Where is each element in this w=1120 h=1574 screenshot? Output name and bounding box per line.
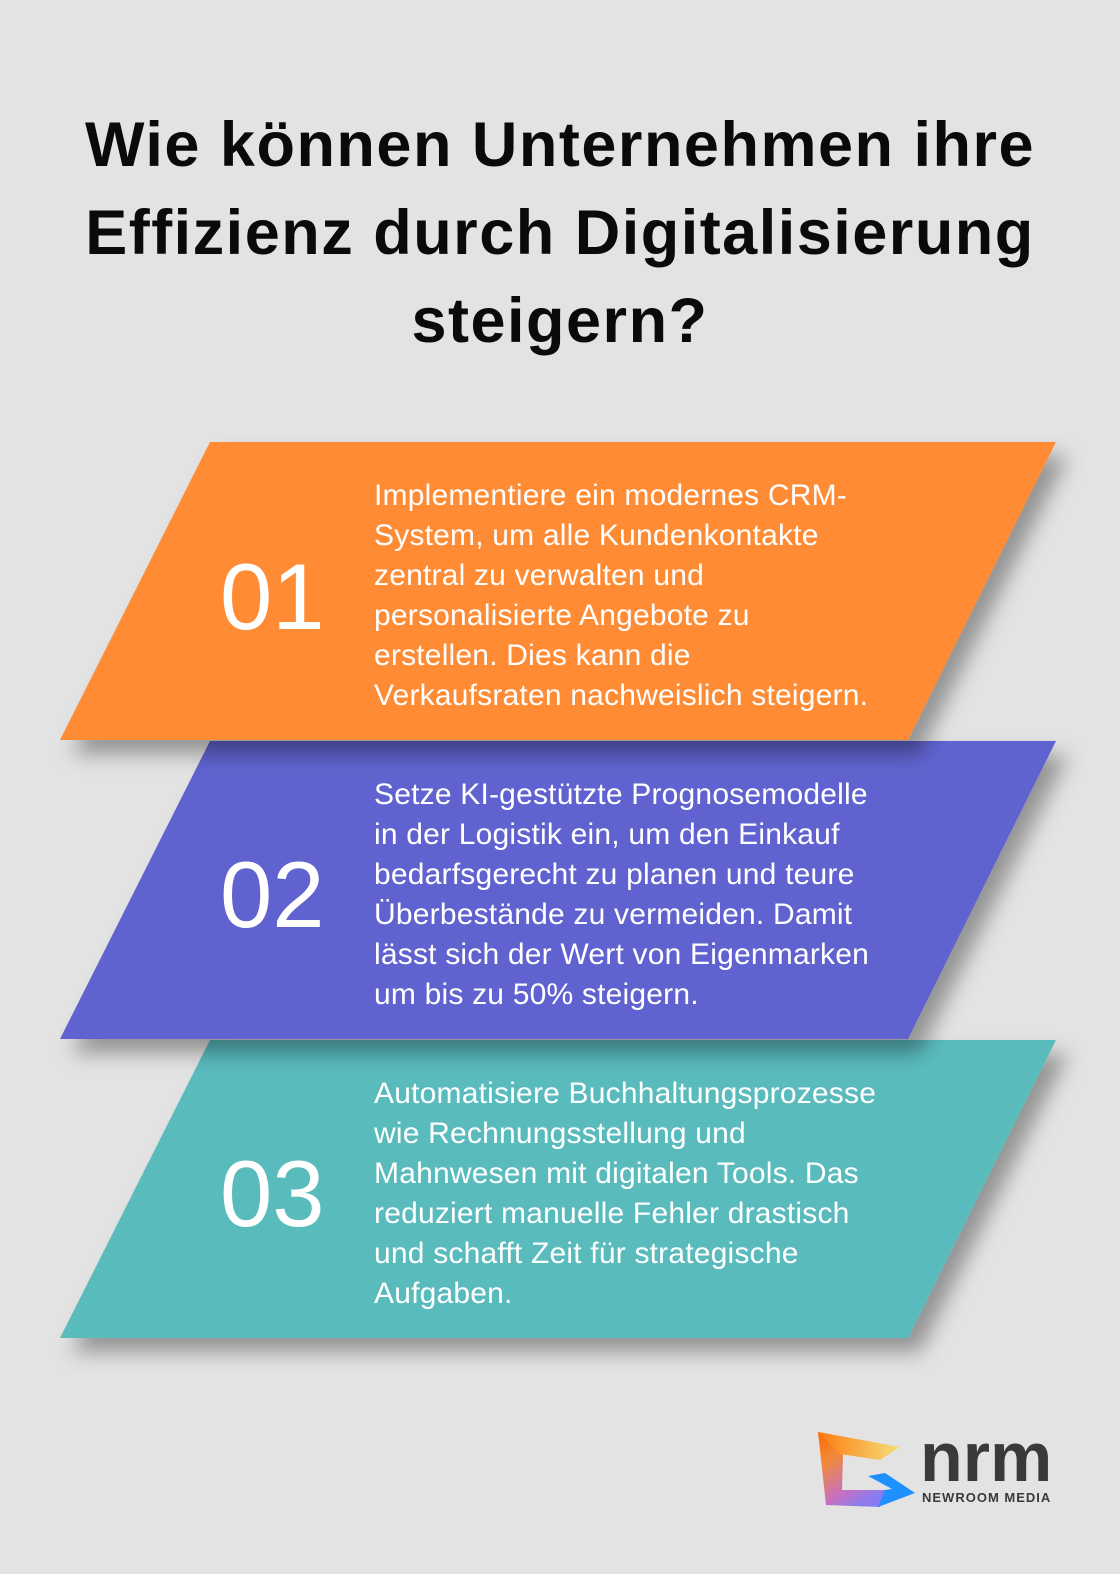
panel 1 text: Implementiere ein modernes CRM- <box>374 479 847 512</box>
logo: NEWROOM MEDIA <box>922 1490 1051 1505</box>
title: Wie können Unternehmen ihre <box>85 110 1035 180</box>
panel 2 text: in der Logistik ein, um den Einkauf <box>374 818 840 851</box>
panel 3 text: Aufgaben. <box>374 1277 513 1310</box>
panel 1 text: Verkaufsraten nachweislich steigern. <box>374 679 868 712</box>
panel 1 number: 01 <box>220 544 325 649</box>
icon: logo mark <box>818 1432 915 1507</box>
panel 2 text: Überbestände zu vermeiden. Damit <box>374 898 852 931</box>
title: Effizienz durch Digitalisierung <box>85 198 1035 268</box>
panel 1 text: personalisierte Angebote zu <box>374 599 750 632</box>
panel 2 text: lässt sich der Wert von Eigenmarken <box>374 938 869 971</box>
panel 2 text: Setze KI-gestützte Prognosemodelle <box>374 778 868 811</box>
logo <box>818 1418 1052 1507</box>
panel 3 text: Automatisiere Buchhaltungsprozesse <box>374 1077 876 1110</box>
panel 3 text: reduziert manuelle Fehler drastisch <box>374 1197 850 1230</box>
panel 1 shape <box>60 442 1056 740</box>
title: steigern? <box>411 286 709 356</box>
panel 3 text: wie Rechnungsstellung und <box>374 1117 746 1150</box>
title <box>85 110 1035 356</box>
panel 1 text: zentral zu verwalten und <box>374 559 704 592</box>
panel 3 text: und schafft Zeit für strategische <box>374 1237 799 1270</box>
panel 2 number: 02 <box>220 842 325 947</box>
panel 1 text <box>374 479 868 712</box>
panel 2 text: um bis zu 50% steigern. <box>374 978 699 1011</box>
panel 3 text: Mahnwesen mit digitalen Tools. Das <box>374 1157 859 1190</box>
panel 1 text: erstellen. Dies kann die <box>374 639 691 672</box>
panel 3 shape <box>60 1040 1056 1338</box>
panel 3 text <box>374 1077 876 1310</box>
panel 2 text: bedarfsgerecht zu planen und teure <box>374 858 854 891</box>
panel 2 text <box>374 778 869 1011</box>
panel 3 number: 03 <box>220 1141 325 1246</box>
logo text: nrm <box>920 1418 1052 1496</box>
panel 2 shape <box>60 741 1056 1039</box>
panel 1 text: System, um alle Kundenkontakte <box>374 519 819 552</box>
